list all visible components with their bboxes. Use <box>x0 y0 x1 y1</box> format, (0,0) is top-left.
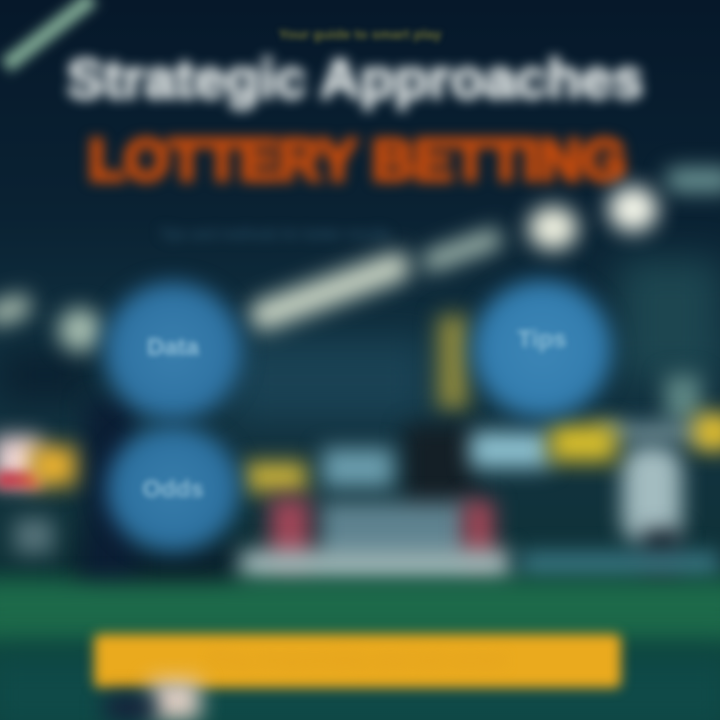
crossbar right <box>600 424 720 440</box>
light: middle streak <box>419 226 505 274</box>
pitch lower <box>0 650 720 720</box>
circle: top right <box>472 280 612 418</box>
banner: blue centre <box>322 448 394 488</box>
player right legs <box>642 530 680 580</box>
subtitle: Tips and methods for better results <box>159 226 391 243</box>
call to action text: Play responsibly and bet smart <box>210 650 506 672</box>
decorative light streak top left <box>1 0 97 72</box>
circle label: bottom left: Odds <box>142 476 204 503</box>
white ad boards <box>240 550 510 580</box>
goal area <box>320 502 470 562</box>
call to action bar <box>94 634 621 688</box>
light: spot one <box>528 206 578 250</box>
title: strategic approaches: Strategic Approaches <box>67 47 643 110</box>
player right upper <box>665 375 701 421</box>
banner: blue right <box>470 432 550 468</box>
boards right <box>520 552 720 576</box>
light: spot two <box>608 186 658 232</box>
circle label: top left: Data <box>147 334 199 361</box>
bottom dark shape <box>105 695 155 720</box>
eyebrow line: Your guide to smart play <box>278 26 442 42</box>
banner: yellow left <box>30 446 76 486</box>
dark tower base <box>405 425 475 545</box>
banner: yellow edge <box>694 414 720 450</box>
banner: pale left <box>0 436 40 486</box>
banner: red stripe <box>0 472 40 488</box>
title: lottery betting: LOTTERY BETTING <box>88 128 627 193</box>
circle label: top right: Tips <box>518 326 566 353</box>
circle: bottom left <box>106 426 240 552</box>
floodlight tower <box>438 315 468 410</box>
player red left <box>270 498 310 568</box>
banner: yellow right <box>550 424 616 462</box>
player right <box>622 445 682 545</box>
bottom player <box>150 680 200 720</box>
light: right edge <box>665 168 720 192</box>
banner: yellow centre <box>245 462 307 492</box>
light: long streak <box>245 248 415 334</box>
dark figure left <box>85 400 135 590</box>
light streak across the middle <box>0 153 720 366</box>
football pitch <box>0 582 720 642</box>
light: left spot <box>58 308 102 352</box>
banner row <box>0 396 720 589</box>
light: left edge <box>0 291 35 329</box>
grey spot left <box>14 518 54 554</box>
player red right <box>464 500 494 566</box>
circle: top left <box>104 282 242 420</box>
